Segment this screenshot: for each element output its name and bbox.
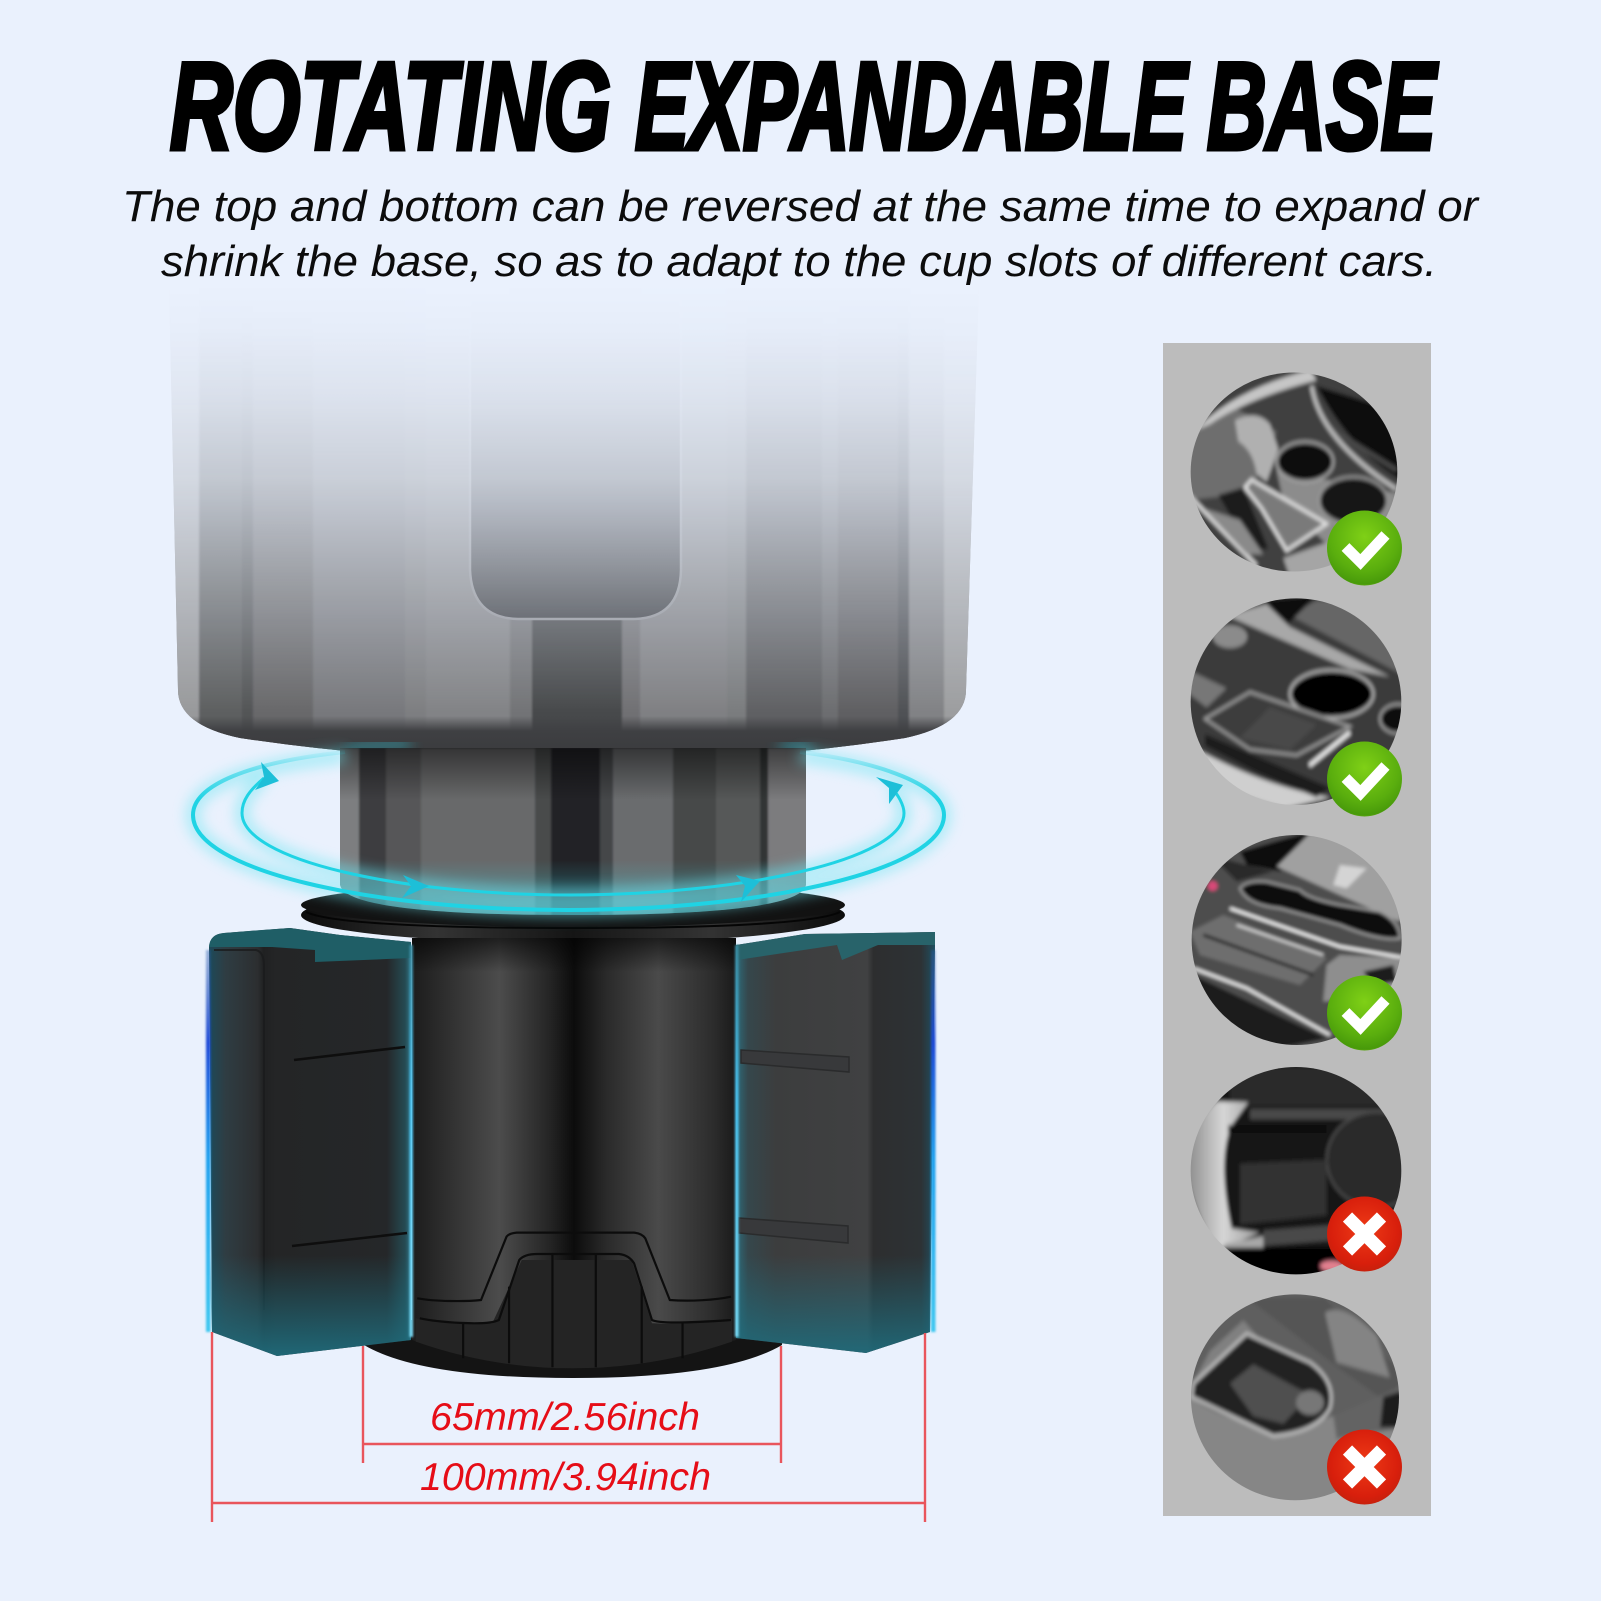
- right wing top tabs: [736, 932, 935, 960]
- rotating neck: [336, 748, 810, 918]
- title: EXPANDABLE: [635, 38, 1189, 176]
- dimension label: 100mm: 100mm/3.94inch: [420, 1456, 711, 1499]
- badge: cross 2: [1327, 1430, 1402, 1504]
- subtitle text: The top and bottom can be reversed at the same time to expand or: [122, 182, 1480, 231]
- badge: check 3: [1327, 976, 1402, 1050]
- outer ring: [193, 752, 944, 910]
- dimension label: 65mm: 65mm/2.56inch: [430, 1396, 700, 1439]
- cup base shadow band: [192, 718, 952, 751]
- rotation arrows: [193, 752, 944, 910]
- left expanding wing: [206, 928, 413, 1356]
- lower cylinder detail: [416, 1233, 732, 1368]
- right expanding wing: [735, 932, 936, 1353]
- inner ring: [242, 778, 904, 895]
- product: cup holder illustration: [160, 280, 990, 1378]
- panel: compatible cup slots: [1163, 343, 1431, 1516]
- photo: fits console 3: [1192, 835, 1402, 1045]
- badge: check 2: [1327, 742, 1402, 816]
- badge: cross 1: [1327, 1196, 1402, 1272]
- cup pocket recess: [469, 457, 682, 620]
- base bottom cap: [364, 1320, 782, 1378]
- right wing slots: [741, 1050, 849, 1072]
- photo: fits console 1: [1190, 372, 1398, 572]
- title: ROTATING: [170, 38, 611, 176]
- badge: check 1: [1327, 510, 1402, 586]
- cyan glow at neck: [345, 744, 810, 750]
- photo: unsuitable console 5: [1191, 1294, 1399, 1500]
- subtitle text: [122, 182, 1480, 286]
- dimension lines: [212, 1332, 925, 1522]
- cylinder flange: [301, 883, 845, 943]
- title: BASE: [1207, 38, 1438, 176]
- central cylinder: [412, 938, 736, 1368]
- title: [170, 38, 1438, 176]
- subtitle text: shrink the base, so as to adapt to the cup slots of different cars.: [161, 237, 1437, 286]
- arrowheads: [255, 762, 903, 902]
- left wing top tabs: [209, 928, 411, 962]
- photo: unsuitable console 4: [1190, 1067, 1402, 1274]
- faded upper cup body: [171, 344, 976, 751]
- photo: fits console 2: [1190, 598, 1402, 805]
- ring glow: [193, 756, 944, 910]
